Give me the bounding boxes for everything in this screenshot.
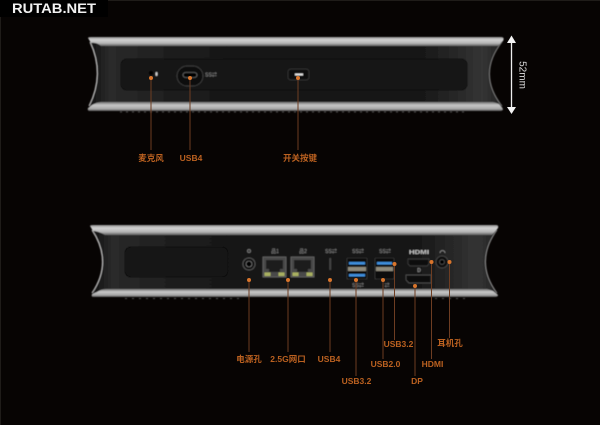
callout: HDMI — [422, 260, 443, 369]
USB 3.2 and USB 2.0 stacked ports: SS⇄ — [379, 248, 391, 255]
USB 3.2 stacked ports: SS⇄ — [352, 282, 364, 289]
callout: HDMI: HDMI — [422, 359, 443, 369]
callout: 电源孔 — [236, 278, 262, 364]
callout: DP — [411, 284, 423, 386]
USB 3.2 and USB 2.0 stacked ports — [375, 248, 394, 289]
callout: 麦克风: 麦克风 — [138, 153, 164, 163]
front body — [89, 40, 503, 108]
DP port: D — [417, 268, 421, 274]
headphone jack — [436, 251, 448, 268]
callout: 开关按键: 开关按键 — [283, 153, 317, 163]
front bottom metal band — [88, 102, 503, 111]
USB4 rear port: SS⇄ — [325, 248, 337, 255]
power button — [288, 69, 309, 80]
callout: USB2.0: USB2.0 — [371, 359, 401, 369]
ethernet port 1 — [263, 249, 286, 277]
front inner recessed panel — [121, 59, 467, 90]
device: rear view — [90, 225, 498, 298]
ethernet port 2: 品2 — [299, 249, 307, 255]
callout: 耳机孔: 耳机孔 — [437, 338, 463, 348]
front underside vents — [120, 111, 467, 113]
USB4 front port: SS⇄ — [205, 72, 217, 78]
callout: 开关按键 — [283, 76, 317, 163]
ethernet port 2 — [291, 249, 314, 277]
callout: USB4 front — [180, 76, 203, 163]
rear right rim — [486, 230, 497, 293]
rear body — [92, 228, 498, 295]
callout: 2.5G网口: 2.5G网口 — [270, 354, 306, 364]
front left rim — [89, 42, 97, 106]
device: front view — [88, 37, 504, 112]
callout: USB3.2 lower: USB3.2 — [342, 376, 372, 386]
front right rim — [490, 42, 502, 106]
callout: USB3.2 lower — [342, 278, 372, 386]
callout: 2.5G网口 — [270, 278, 306, 364]
rear top metal band — [90, 225, 498, 235]
HDMI port — [408, 250, 430, 266]
callout: DP: DP — [411, 376, 423, 386]
USB 3.2 and USB 2.0 stacked ports: ⇄ — [384, 282, 390, 289]
dimension arrow: 52mm — [507, 36, 528, 114]
watermark: RUTAB.NET: RUTAB.NET — [12, 1, 97, 16]
rear left rim — [92, 230, 102, 293]
callout: 电源孔: 电源孔 — [236, 354, 262, 364]
watermark: RUTAB.NET — [0, 0, 108, 17]
callout: USB2.0 — [371, 278, 401, 369]
USB 3.2 stacked ports — [347, 248, 367, 289]
callout: USB4 rear: USB4 — [318, 354, 341, 364]
USB4 rear port — [325, 248, 337, 270]
rear vent panel — [125, 247, 228, 277]
USB4 front port — [177, 66, 217, 86]
ethernet port 1: 品1 — [271, 249, 279, 255]
DP port — [406, 268, 431, 283]
HDMI port: HDMI — [409, 250, 430, 256]
callout: USB4 front: USB4 — [180, 153, 203, 163]
callout: USB4 rear — [318, 278, 341, 364]
dimension arrow: 52mm: 52mm — [516, 61, 528, 89]
callout: USB3.2 upper — [384, 262, 414, 349]
callout: USB3.2 upper: USB3.2 — [384, 339, 414, 349]
rear bottom metal band — [92, 289, 498, 297]
icon: microphone hole — [149, 71, 158, 76]
callout: 麦克风 — [138, 76, 164, 163]
front top metal band — [88, 37, 504, 46]
rear underside vents — [125, 298, 468, 300]
callout: 耳机孔 — [437, 260, 463, 348]
power jack — [243, 250, 255, 270]
USB 3.2 stacked ports: SS⇄ — [352, 248, 364, 255]
